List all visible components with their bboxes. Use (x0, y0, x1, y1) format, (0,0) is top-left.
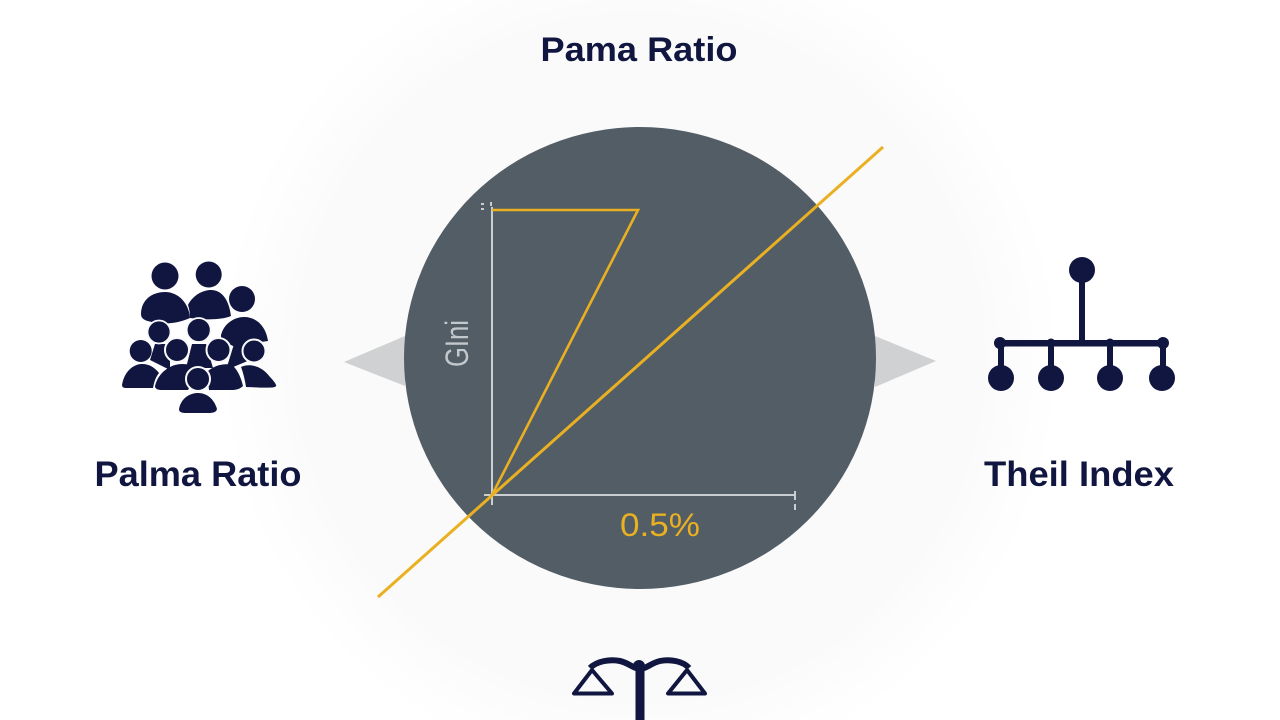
middle row fill (150, 344, 170, 370)
axis tick marks (481, 202, 796, 510)
central circle (404, 127, 876, 589)
lorenz triangle outline (492, 210, 638, 495)
white-ringed heads (165, 338, 266, 391)
title: Pama Ratio: Pama Ratio (540, 31, 738, 69)
diagonal equality line (378, 147, 883, 597)
left pointer triangle (344, 336, 405, 386)
lorenz chart (378, 147, 883, 597)
icon: people group (122, 262, 276, 413)
icon: tree hierarchy (988, 257, 1175, 391)
label: Palma Ratio: Palma Ratio (94, 455, 302, 494)
chart axes (484, 207, 795, 505)
icon: balance scale (574, 660, 705, 720)
label: Theil Index: Theil Index (984, 455, 1175, 494)
right pointer triangle (875, 336, 936, 387)
x axis value: 0.5%: 0.5% (620, 507, 700, 543)
y axis label: Gini: GIni (439, 320, 475, 367)
